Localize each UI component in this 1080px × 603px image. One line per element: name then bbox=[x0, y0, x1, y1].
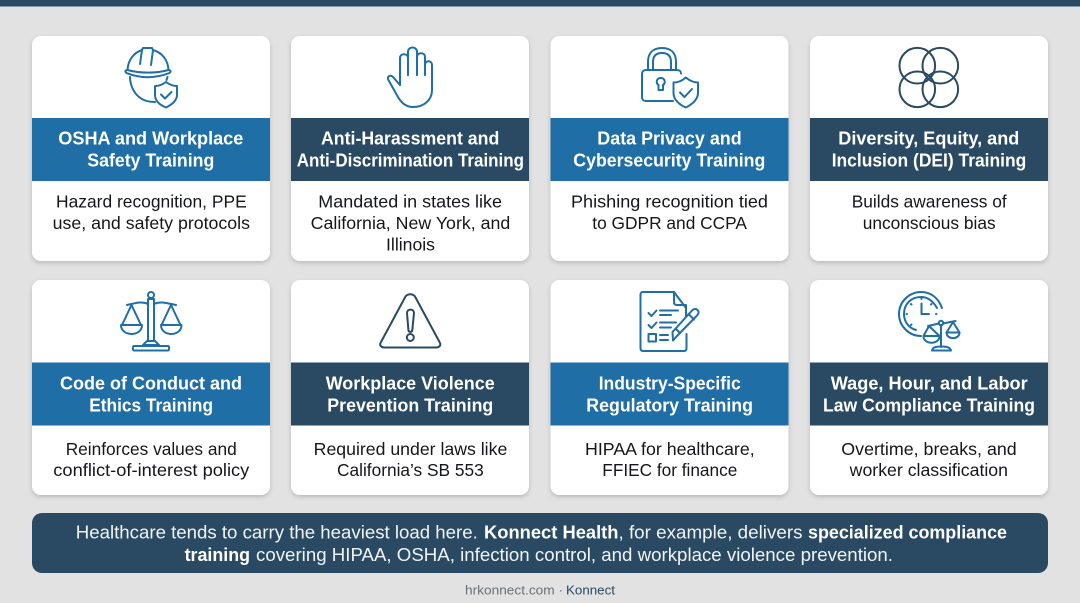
callout: healthcare note: , for example, delivers bbox=[618, 522, 802, 542]
description: California’s SB 553 bbox=[337, 460, 484, 480]
heading bbox=[823, 372, 1035, 416]
description bbox=[571, 192, 768, 233]
description: Mandated in states like bbox=[318, 192, 502, 212]
heading bbox=[297, 128, 524, 170]
card: Anti-Harassment and Anti-Discrimination Training bbox=[291, 36, 529, 261]
heading bbox=[60, 372, 242, 416]
description bbox=[585, 439, 755, 480]
heading: Regulatory Training bbox=[586, 395, 753, 416]
description bbox=[852, 192, 1007, 233]
callout: healthcare note: Healthcare tends to carry the heaviest load here. bbox=[76, 522, 478, 542]
heading bbox=[573, 128, 765, 170]
heading: OSHA and Workplace bbox=[58, 128, 243, 148]
callout: healthcare note: Konnect Health bbox=[484, 522, 618, 542]
description: worker classification bbox=[849, 460, 1008, 480]
description: Reinforces values and bbox=[66, 439, 237, 459]
callout: healthcare note: covering HIPAA, OSHA, infection control, and workplace violence prevention. bbox=[256, 544, 893, 565]
card: Workplace Violence Prevention Training bbox=[291, 280, 529, 495]
card: Wage, Hour, and Labor Law Compliance Training bbox=[810, 280, 1048, 495]
description bbox=[314, 439, 507, 480]
heading bbox=[586, 372, 753, 416]
footer source: Konnect bbox=[566, 582, 615, 598]
top bar bbox=[0, 0, 1080, 6]
description: Builds awareness of bbox=[852, 192, 1007, 212]
icon: hard hat with shield bbox=[125, 48, 177, 108]
footer source: hrkonnect.com · bbox=[465, 582, 563, 598]
heading bbox=[832, 128, 1026, 170]
heading band bbox=[550, 118, 788, 181]
description: Illinois bbox=[386, 234, 435, 254]
icon: four overlapping circles bbox=[900, 48, 958, 107]
description: Hazard recognition, PPE bbox=[56, 192, 247, 212]
icon: warning triangle bbox=[380, 294, 440, 348]
description: HIPAA for healthcare, bbox=[585, 439, 755, 459]
heading: Anti-Discrimination Training bbox=[297, 150, 524, 170]
card: OSHA and Workplace Safety Training bbox=[32, 36, 270, 261]
heading: Law Compliance Training bbox=[823, 395, 1035, 416]
description: conflict-of-interest policy bbox=[53, 460, 250, 480]
heading: Cybersecurity Training bbox=[573, 150, 765, 170]
description bbox=[311, 192, 510, 254]
heading: Inclusion (DEI) Training bbox=[832, 150, 1026, 170]
callout: healthcare note: training bbox=[185, 544, 250, 565]
icon: raised hand bbox=[388, 48, 432, 107]
heading band bbox=[291, 362, 529, 426]
description bbox=[841, 439, 1017, 480]
heading: Code of Conduct and bbox=[60, 372, 242, 394]
description bbox=[53, 439, 250, 480]
icon: checklist document with pencil bbox=[640, 292, 699, 351]
heading: Data Privacy and bbox=[597, 128, 742, 148]
heading band bbox=[810, 118, 1048, 181]
card: Data Privacy and Cybersecurity Training bbox=[550, 36, 788, 261]
footer source bbox=[465, 582, 615, 598]
heading band bbox=[32, 118, 270, 181]
description: use, and safety protocols bbox=[53, 213, 250, 233]
heading: Wage, Hour, and Labor bbox=[831, 372, 1028, 394]
description: FFIEC for finance bbox=[602, 460, 737, 480]
heading band bbox=[810, 362, 1048, 426]
heading band bbox=[32, 362, 270, 426]
description: unconscious bias bbox=[863, 213, 996, 233]
heading bbox=[58, 128, 243, 170]
callout: healthcare note: specialized compliance bbox=[808, 522, 1007, 542]
description: Overtime, breaks, and bbox=[841, 439, 1017, 459]
heading: Prevention Training bbox=[327, 395, 493, 416]
card: Diversity, Equity, and Inclusion (DEI) Training bbox=[810, 36, 1048, 261]
description: Phishing recognition tied bbox=[571, 192, 768, 212]
heading: Anti-Harassment and bbox=[321, 128, 499, 148]
icon: balance scales bbox=[121, 292, 182, 350]
heading band bbox=[550, 362, 788, 426]
heading band bbox=[291, 118, 529, 181]
heading: Industry-Specific bbox=[599, 372, 741, 394]
heading: Safety Training bbox=[87, 150, 214, 170]
heading: Diversity, Equity, and bbox=[838, 128, 1019, 148]
description bbox=[53, 192, 250, 233]
description: Required under laws like bbox=[314, 439, 507, 459]
card: Industry-Specific Regulatory Training bbox=[550, 280, 788, 495]
icon: padlock with shield bbox=[642, 48, 698, 108]
heading bbox=[326, 372, 495, 416]
description: to GDPR and CCPA bbox=[592, 213, 747, 233]
callout: healthcare note bbox=[32, 513, 1048, 573]
heading: Workplace Violence bbox=[326, 372, 495, 394]
description: California, New York, and bbox=[311, 213, 510, 233]
card: Code of Conduct and Ethics Training bbox=[32, 280, 270, 495]
icon: clock with balance scales bbox=[899, 292, 960, 350]
heading: Ethics Training bbox=[89, 395, 213, 416]
